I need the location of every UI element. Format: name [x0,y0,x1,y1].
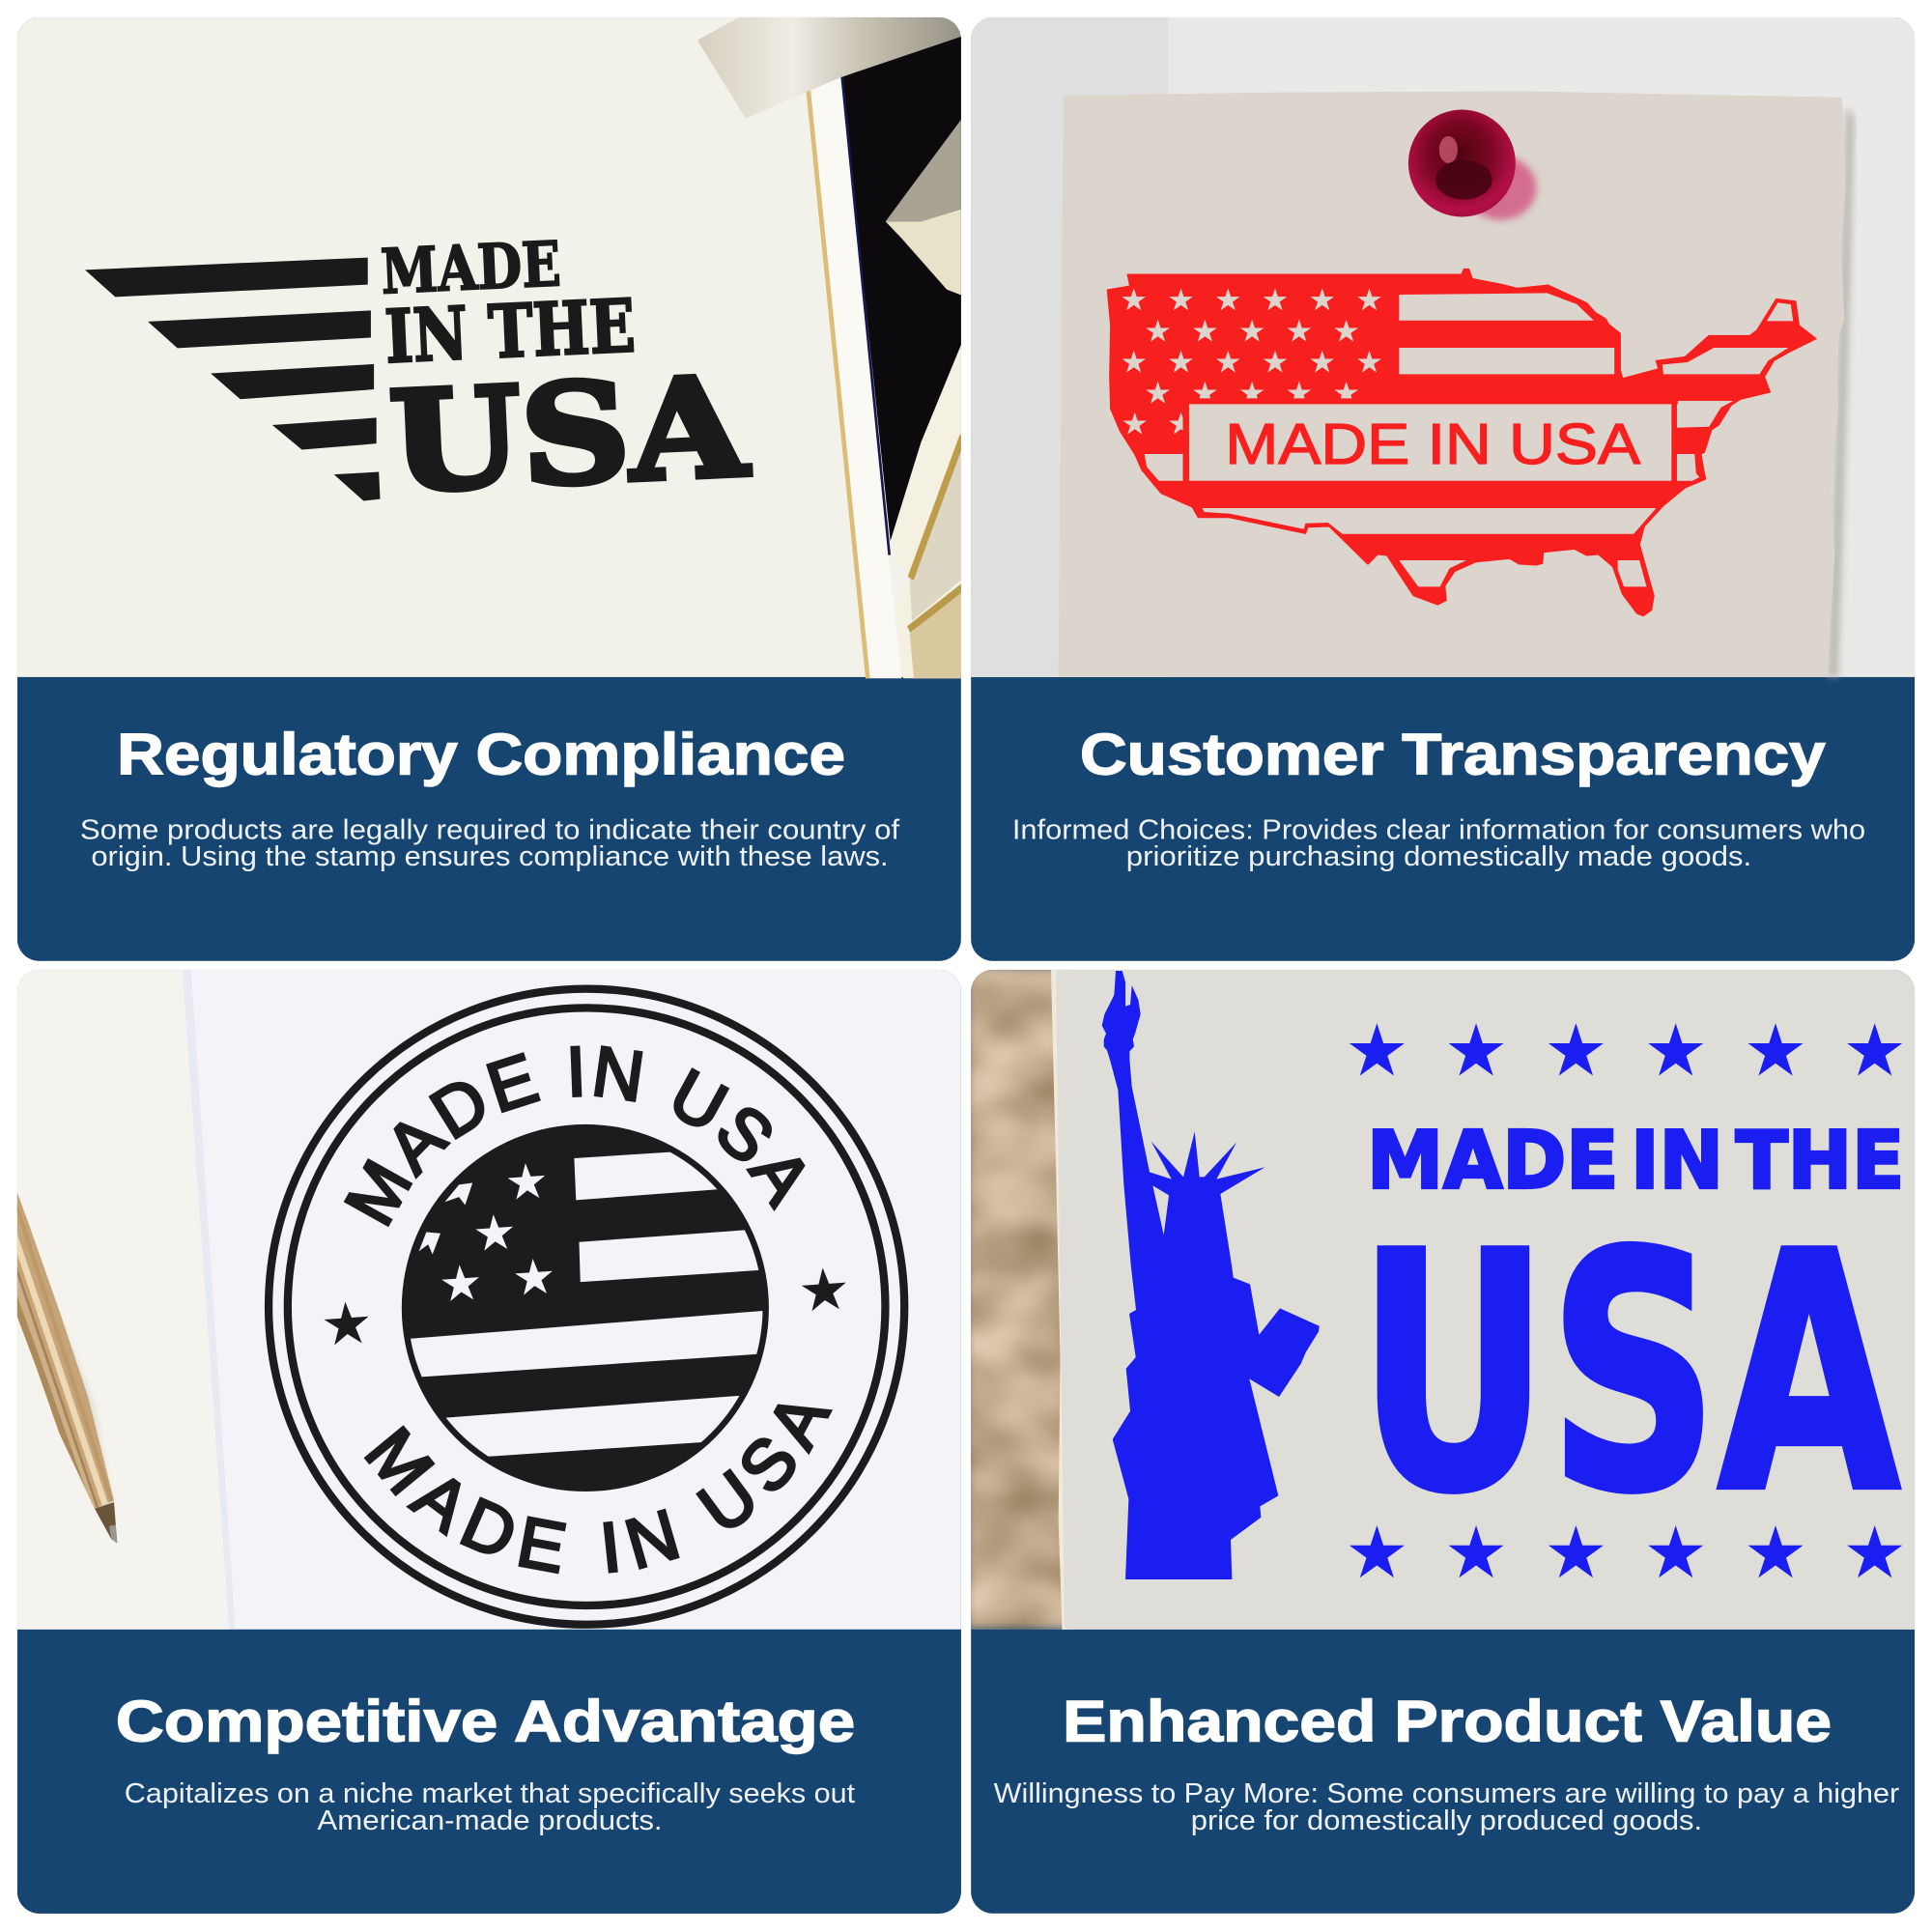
panel: customer transparency [971,17,1915,961]
stamp: made in the usa wording: IN THE [384,282,637,380]
curved text top: MADE IN USA [344,1045,806,1227]
heading: regulatory compliance: Regulatory Compliance [117,723,845,787]
stamp: made in the usa wording [381,240,753,493]
panel: enhanced product value [966,966,1915,1914]
body text: enhanced product value [994,1778,1900,1836]
small star right [801,1266,848,1312]
body text: regulatory compliance: origin. Using the stamp ensures compliance with these laws. [91,841,889,872]
panel: regulatory compliance [17,17,967,961]
stamp: round made in usa seal [265,985,908,1629]
panel: competitive advantage [17,970,961,1914]
small star left [325,1302,369,1345]
body text: customer transparency: prioritize purchasing domestically made goods. [1126,841,1751,872]
stamp: usa flag map [1107,269,1816,616]
heading: competitive advantage: Competitive Advantage [116,1689,855,1753]
star row top [1350,1023,1902,1076]
stamp: usa flag map: MADE IN USA [1225,412,1641,476]
stamp: made in the usa wording: MADE [380,228,562,309]
body text: enhanced product value: Willingness to Pay More: Some consumers are willing to pay a higher [994,1778,1900,1809]
body text: customer transparency [1012,815,1865,872]
photo: stamped paper with ribbon [17,17,967,678]
heading: customer transparency: Customer Transparency [1080,723,1826,787]
curved text bottom: MADE IN USA [363,1405,833,1575]
icon: gold pen [17,1192,118,1544]
heading: enhanced product value: Enhanced Product Value [1063,1689,1832,1753]
body text: regulatory compliance [80,815,900,872]
body text: competitive advantage: Capitalizes on a niche market that specifically seeks out [125,1778,855,1809]
photo: torn paper pinned to wall [971,17,1915,677]
photo: paper on blurred beige background [966,966,1915,1630]
star row bottom [1350,1525,1902,1577]
flag circle [394,1124,777,1492]
body text: competitive advantage [125,1778,855,1836]
body text: enhanced product value: price for domestically produced goods. [1191,1805,1702,1836]
body text: competitive advantage: American-made products. [317,1805,663,1836]
icon: red push pin [1408,110,1516,216]
body text: customer transparency: Informed Choices: Provides clear information for consumers who [1012,815,1865,846]
text: made in the: MADE IN THE [1367,1116,1904,1208]
body text: regulatory compliance: Some products are legally required to indicate their country of [80,815,900,846]
stamp: wing stripes [85,258,380,500]
stamp: made in the usa wording: USA [386,347,752,524]
photo: white paper with gold pen [17,970,961,1630]
icon: statue of liberty [1102,971,1320,1579]
